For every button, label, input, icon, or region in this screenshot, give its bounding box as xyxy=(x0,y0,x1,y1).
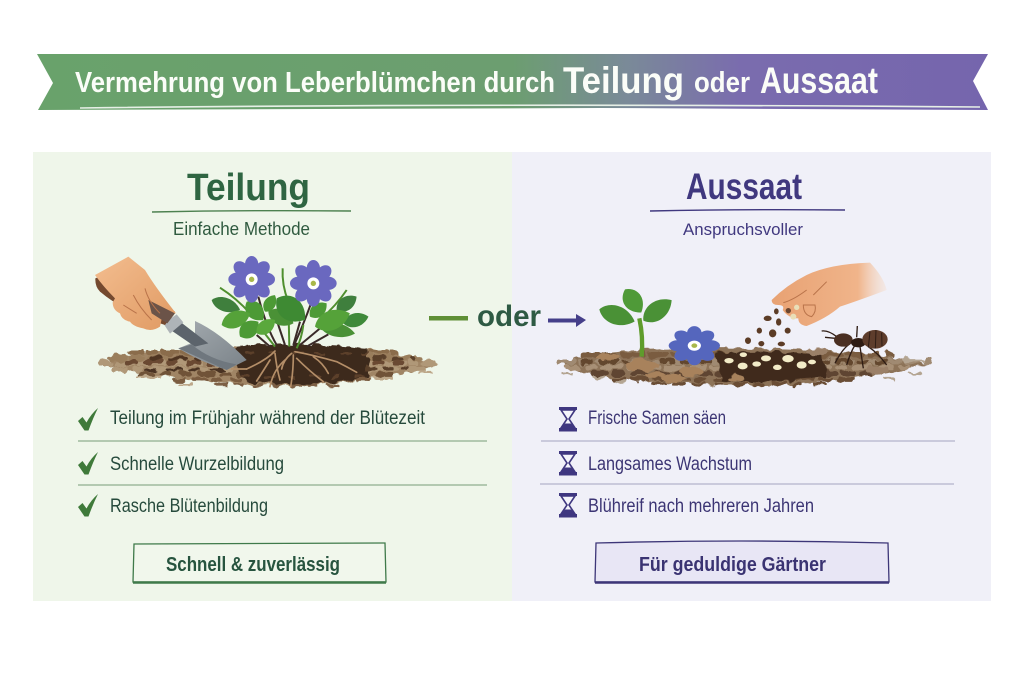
check icon 3 xyxy=(78,494,98,516)
check icon 1 xyxy=(78,408,98,430)
title text: oder xyxy=(694,67,750,99)
title text xyxy=(75,60,878,101)
checklist: Teilung: Teilung im Frühjahr während der Blütezeit xyxy=(110,408,426,429)
illustration: division with trowel xyxy=(95,256,438,387)
title banner xyxy=(37,54,988,110)
list: Aussaat: Langsames Wachstum xyxy=(588,454,752,475)
trowel xyxy=(95,276,247,370)
seeding hand xyxy=(772,263,887,326)
title text: Aussaat xyxy=(760,60,878,101)
flowers xyxy=(228,256,275,303)
list: Aussaat: Frische Samen säen xyxy=(588,408,726,429)
hourglass icon 3 xyxy=(559,493,577,518)
ant xyxy=(822,326,888,368)
title text: Vermehrung von Leberblümchen durch xyxy=(75,67,555,99)
seeds in soil xyxy=(724,352,816,370)
subheading: Einfache Methode: Einfache Methode xyxy=(173,219,310,239)
check icon 2 xyxy=(78,452,98,474)
connector: oder with arrow: oder xyxy=(477,300,541,333)
checklist: Teilung: Schnelle Wurzelbildung xyxy=(110,454,284,475)
stems xyxy=(257,297,328,347)
badge: Für geduldige Gärtner xyxy=(595,541,889,582)
connector: oder with arrow xyxy=(429,300,586,333)
list: Aussaat xyxy=(540,407,955,518)
heading: Aussaat: Aussaat xyxy=(686,166,802,207)
arrow xyxy=(548,314,586,327)
title text: Teilung xyxy=(563,60,684,101)
soil xyxy=(560,348,930,385)
list: Aussaat: Blühreif nach mehreren Jahren xyxy=(588,496,814,517)
hourglass icon 1 xyxy=(559,407,577,432)
hourglass icon 2 xyxy=(559,451,577,476)
blue flower xyxy=(669,326,720,365)
subheading: Anspruchsvoller: Anspruchsvoller xyxy=(683,220,803,239)
roots xyxy=(232,351,357,387)
hand xyxy=(95,257,176,330)
panel: Teilung xyxy=(33,152,512,601)
panel: Aussaat xyxy=(512,152,991,601)
soil xyxy=(100,344,438,386)
falling seeds xyxy=(745,308,791,346)
sprout xyxy=(596,284,677,357)
checklist: Teilung: Rasche Blütenbildung xyxy=(110,496,268,517)
badge: Für geduldige Gärtner: Für geduldige Gärtner xyxy=(639,554,826,576)
leaves xyxy=(209,289,370,343)
checklist: Teilung xyxy=(78,408,487,517)
illustration: sowing seeds xyxy=(560,263,930,385)
badge: Schnell & zuverlässig: Schnell & zuverlässig xyxy=(166,554,340,576)
heading: Teilung: Teilung xyxy=(187,167,310,209)
badge: Schnell & zuverlässig xyxy=(133,543,386,582)
